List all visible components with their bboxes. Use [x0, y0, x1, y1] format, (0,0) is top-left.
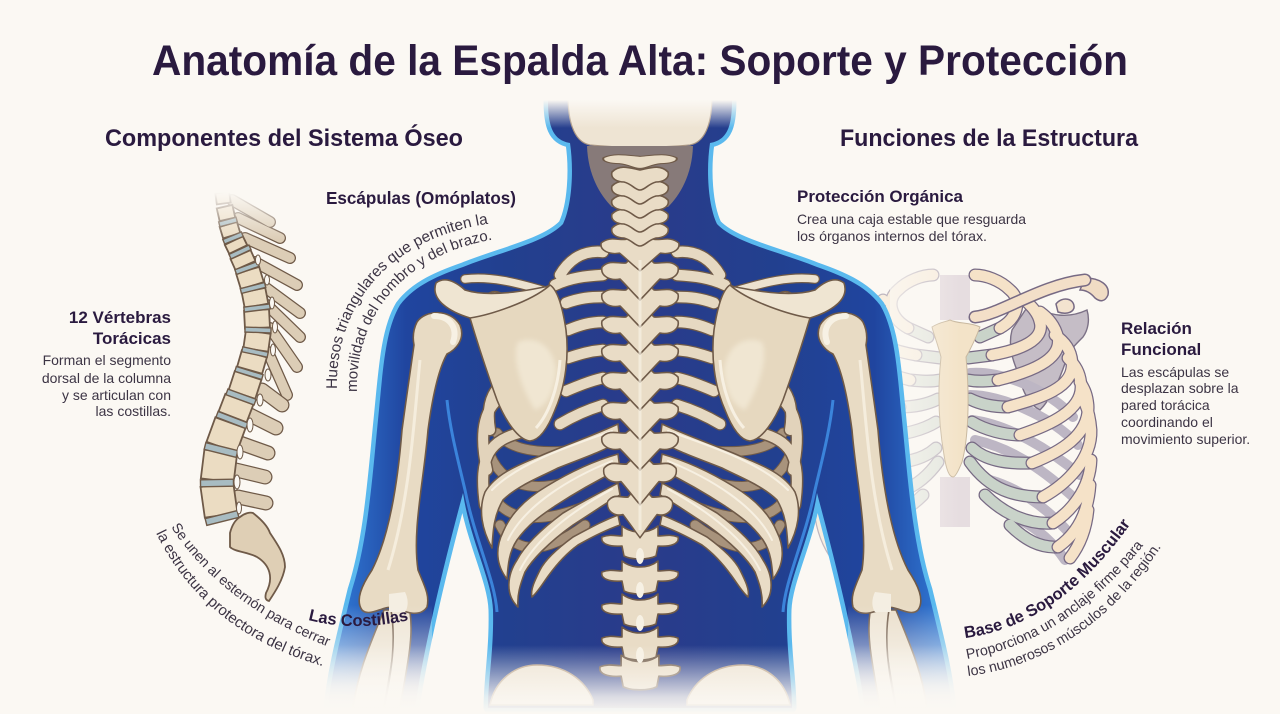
text block: relación funcional: Las escápulas se: [1121, 364, 1229, 380]
text block: relación funcional: [1121, 319, 1250, 447]
text block: escápulas: Huesos triangulares que permiten la: [326, 214, 488, 388]
text block: protección orgánica: Crea una caja estable que resguarda: [797, 211, 1026, 227]
text block: vértebras: 12 Vértebras: [69, 308, 171, 327]
foramina: [234, 255, 278, 514]
bone ribs: [975, 275, 1091, 558]
fade over left part: [890, 260, 960, 560]
text block: protección orgánica: los órganos internos del tórax.: [797, 228, 987, 244]
spine highlights: [636, 260, 644, 663]
heading: right column: Funciones de la Estructura: [840, 125, 1138, 152]
right half bones: [660, 252, 927, 708]
heading: left column: Componentes del Sistema Óseo: [105, 124, 463, 152]
text block: costillas: [156, 523, 408, 666]
coracoid: [1056, 299, 1074, 313]
sacrum: [230, 513, 285, 601]
inner rim line: [447, 400, 833, 612]
sternum: [932, 320, 980, 477]
spine: [600, 155, 680, 690]
illustration: central back skeleton with blue body: [320, 88, 960, 714]
text block: protección orgánica: [797, 187, 1026, 244]
left half bones: [353, 252, 620, 708]
text block: vértebras: las costillas.: [96, 403, 171, 419]
text block: escápulas: movilidad del hombro y del brazo.: [348, 233, 492, 391]
scapula grey: [1010, 303, 1088, 410]
text block: escápulas: Escápulas (Omóplatos): [326, 188, 516, 208]
left forearm fade: [320, 605, 432, 714]
neck shadow: [587, 146, 693, 207]
discs: [200, 217, 271, 525]
text block: costillas: la estructura protectora del tórax.: [156, 529, 322, 666]
illustration: lateral spine: [200, 172, 300, 601]
text block: vértebras: Torácicas: [93, 329, 171, 348]
text block: vértebras: y se articulan con: [62, 387, 171, 403]
vertebral bodies: [201, 192, 271, 518]
faded left ribs: [817, 275, 940, 558]
text block: costillas: Las Costillas: [309, 609, 408, 626]
right forearm fade: [848, 605, 960, 714]
text block: relación funcional: pared torácica: [1121, 397, 1210, 413]
body silhouette: [328, 100, 952, 708]
illustration: rib cage front view: [817, 260, 1108, 560]
text block: relación funcional: Relación: [1121, 319, 1192, 338]
back ribs: [970, 373, 1082, 560]
title: Anatomía de la Espalda Alta: Soporte y Protección: [152, 37, 1128, 85]
text block: base de soporte muscular: Proporciona un anclaje firme para: [966, 542, 1144, 659]
text block: vértebras: dorsal de la columna: [42, 370, 171, 386]
spine behind sternum: [940, 275, 970, 527]
text block: base de soporte muscular: Base de Soporte Muscular: [964, 518, 1129, 638]
bottom fade: [320, 645, 960, 714]
text block: relación funcional: Funcional: [1121, 340, 1201, 359]
text block: vértebras: Forman el segmento: [43, 352, 171, 368]
text block: vértebras: [42, 308, 171, 419]
text block: relación funcional: coordinando el: [1121, 414, 1213, 430]
text block: protección orgánica: Protección Orgánica: [797, 187, 964, 206]
top fade of spine: [205, 172, 300, 240]
acromion: [1080, 278, 1108, 301]
spinous processes: [232, 200, 300, 503]
text block: relación funcional: desplazan sobre la: [1121, 380, 1239, 396]
clavicle: [975, 280, 1085, 317]
text block: relación funcional: movimiento superior.: [1121, 431, 1250, 447]
text block: costillas: Se unen al esternón para cerrar: [172, 523, 330, 646]
cartilage ribs: [968, 328, 1058, 547]
skull: [568, 95, 712, 147]
top fade: [530, 88, 750, 128]
text block: base de soporte muscular: los numerosos músculos de la región.: [968, 547, 1160, 676]
